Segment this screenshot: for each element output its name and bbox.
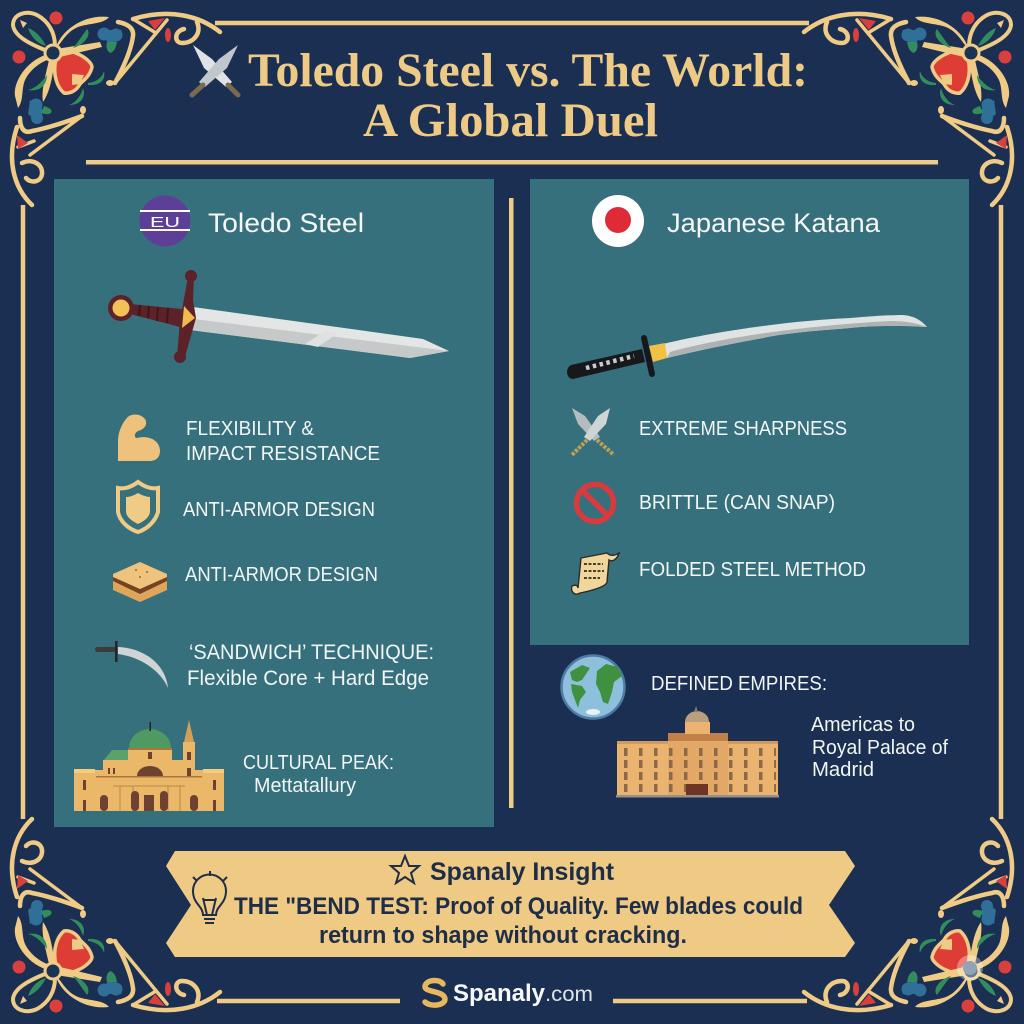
icon: light bulb bbox=[193, 871, 227, 923]
icon: shield bbox=[118, 482, 158, 532]
illustration: royal palace bbox=[616, 706, 779, 798]
text: flexibility: IMPACT RESISTANCE bbox=[186, 443, 380, 465]
callout: Spanaly Insight bbox=[166, 851, 855, 957]
item: anti-armor design bbox=[118, 482, 375, 532]
text: extreme sharpness: EXTREME SHARPNESS bbox=[639, 418, 847, 440]
text: brittle: BRITTLE (CAN SNAP) bbox=[639, 492, 835, 514]
icon: scroll bbox=[571, 553, 619, 594]
illustration: katana bbox=[567, 315, 927, 379]
section: defined empires bbox=[562, 656, 948, 798]
text: bend test: THE "BEND TEST: Proof of Quality. Few blades could bbox=[234, 893, 803, 920]
heading: Toledo Steel: Toledo Steel bbox=[208, 208, 364, 238]
item: cultural peak bbox=[74, 720, 394, 811]
text: flexibility bbox=[186, 418, 380, 465]
icon: star bbox=[391, 856, 419, 883]
illustration: cathedral bbox=[74, 720, 224, 811]
heading: Japanese Katana: Japanese Katana bbox=[667, 208, 881, 238]
icon: prohibition sign bbox=[576, 484, 614, 522]
text: sandwich technique: ‘SANDWICH’ TECHNIQUE: bbox=[189, 641, 434, 664]
text: americas bbox=[811, 714, 948, 781]
item: sandwich technique bbox=[95, 641, 434, 690]
text: folded steel: FOLDED STEEL METHOD bbox=[639, 559, 866, 581]
title: Toledo Steel vs. The World: bbox=[248, 44, 808, 97]
item: flexibility bbox=[118, 414, 380, 465]
icon: crossed blades bbox=[572, 408, 614, 455]
text: americas: Madrid bbox=[812, 759, 874, 781]
text: americas: Americas to bbox=[811, 714, 915, 736]
icon: EU badge bbox=[140, 196, 190, 246]
icon: crossed swords bbox=[192, 45, 238, 95]
wordmark: Spanaly.com bbox=[453, 980, 593, 1007]
text: anti-armor design second: ANTI-ARMOR DESIGN bbox=[185, 564, 378, 586]
item: brittle bbox=[576, 484, 835, 522]
illustration: Toledo sword bbox=[108, 270, 449, 363]
item: extreme sharpness bbox=[572, 408, 847, 455]
icon: curved blade bbox=[95, 641, 168, 688]
icon: EU badge: EU bbox=[150, 214, 180, 231]
icon: Japan flag bbox=[592, 195, 644, 247]
title bbox=[248, 44, 808, 147]
icon: Spanaly S mark bbox=[425, 980, 445, 1005]
text: cultural peak bbox=[243, 752, 394, 797]
text: sandwich technique bbox=[187, 641, 434, 690]
text: anti-armor design: ANTI-ARMOR DESIGN bbox=[183, 499, 375, 521]
heading: Spanaly Insight: Spanaly Insight bbox=[430, 858, 615, 886]
text: bend test bbox=[234, 893, 803, 949]
item: folded steel bbox=[571, 553, 866, 594]
text: cultural peak: CULTURAL PEAK: bbox=[243, 752, 394, 774]
text: defined empires: DEFINED EMPIRES: bbox=[651, 673, 827, 695]
icon: flexed arm bbox=[118, 414, 160, 461]
text: americas: Royal Palace of bbox=[812, 737, 948, 759]
footer logo bbox=[425, 980, 593, 1007]
title: A Global Duel bbox=[363, 94, 658, 147]
text: cultural peak: Mettatallury bbox=[254, 775, 356, 797]
icon: globe bbox=[562, 656, 624, 718]
panel: Japanese Katana bbox=[530, 179, 969, 645]
text: sandwich technique: Flexible Core + Hard Edge bbox=[187, 667, 429, 690]
text: bend test: return to shape without cracking. bbox=[319, 922, 687, 949]
item: sandwich layers bbox=[113, 562, 378, 602]
icon: sandwich bbox=[113, 562, 167, 602]
panel: Toledo Steel bbox=[54, 179, 494, 827]
text: flexibility: FLEXIBILITY & bbox=[186, 418, 315, 440]
